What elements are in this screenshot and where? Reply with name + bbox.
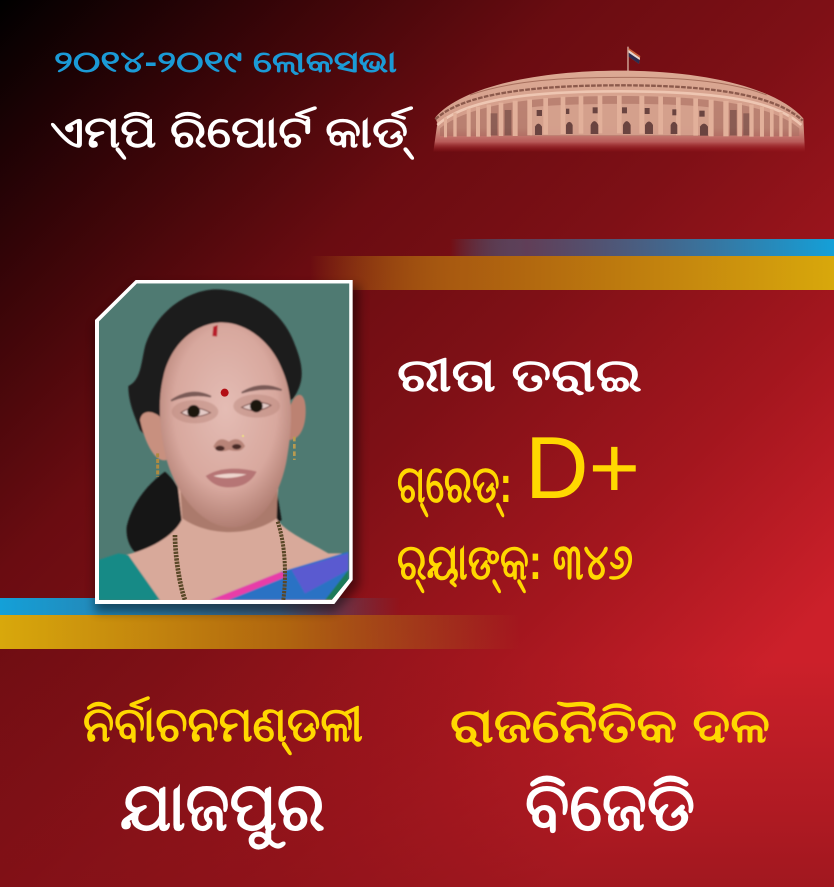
sindoor <box>212 325 218 337</box>
neck and chest <box>126 486 342 600</box>
eyebrows <box>171 392 211 401</box>
heading: term: ୨୦୧୪-୨୦୧୯ ଲୋକସଭା <box>54 46 397 79</box>
ears <box>140 412 167 460</box>
sari left <box>98 553 160 600</box>
party value: ବିଜେଡି <box>525 769 695 845</box>
constituency value: ଯାଜପୁର <box>120 769 325 850</box>
face <box>160 323 291 527</box>
top colour bars <box>310 239 834 290</box>
hair bun <box>127 472 185 560</box>
icon: parliament building <box>433 47 805 152</box>
earrings <box>156 453 160 477</box>
eye shadows <box>172 400 218 423</box>
necklace <box>175 535 185 600</box>
lips <box>206 469 257 487</box>
rank: ର‍୍ୟାଙ୍କ୍: ୩୪୬ <box>397 534 633 594</box>
eyes <box>181 408 210 417</box>
grade: D+ <box>525 418 640 517</box>
name: ରୀତା ତରାଇ <box>397 349 642 401</box>
nose <box>213 439 245 451</box>
bindi <box>221 389 229 397</box>
portrait <box>95 280 355 607</box>
grade: ଗ୍ରେଡ୍: <box>397 456 512 517</box>
bottom colour bars <box>0 598 520 649</box>
constituency label: ନିର୍ବାଚନମଣ୍ଡଳୀ <box>83 696 363 755</box>
heading: report card: ଏମ୍ପି ରିପୋର୍ଟ କାର୍ଡ୍ <box>50 106 415 160</box>
sari right <box>228 551 349 600</box>
portrait shadow <box>95 286 359 612</box>
party label: ରାଜନୈତିକ ଦଳ <box>450 700 770 753</box>
grade <box>397 418 640 517</box>
hair <box>128 289 302 457</box>
